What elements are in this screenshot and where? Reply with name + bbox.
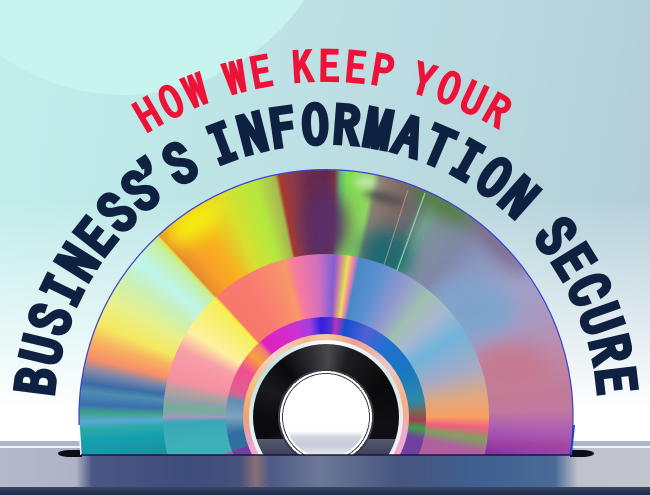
drive body [0,441,650,495]
top face [0,448,650,487]
left slot [58,450,82,457]
centre hole [288,432,364,454]
reflection lines [384,190,426,271]
outer data ring [79,170,573,455]
highlight strip [0,446,650,448]
centre hole rings [278,369,374,455]
disc surface reflections [156,173,570,451]
heading: business's information secure: BUSINESS'S INFORMATION SECURE [12,102,639,396]
view through hole [288,432,364,454]
band behind hub [253,439,399,455]
back edge strip [0,441,650,446]
bottom streaks [486,439,570,451]
compact disc [80,170,572,454]
front edge [0,487,650,495]
metallic hub ring [243,334,409,455]
background light circle [0,0,304,95]
right slot [570,450,594,457]
inner data ring [226,317,426,455]
black hub [253,344,399,455]
metallic hub inner line [249,340,403,455]
middle data ring [163,254,489,455]
heading: how we keep your: HOW WE KEEP YOUR [131,48,512,134]
